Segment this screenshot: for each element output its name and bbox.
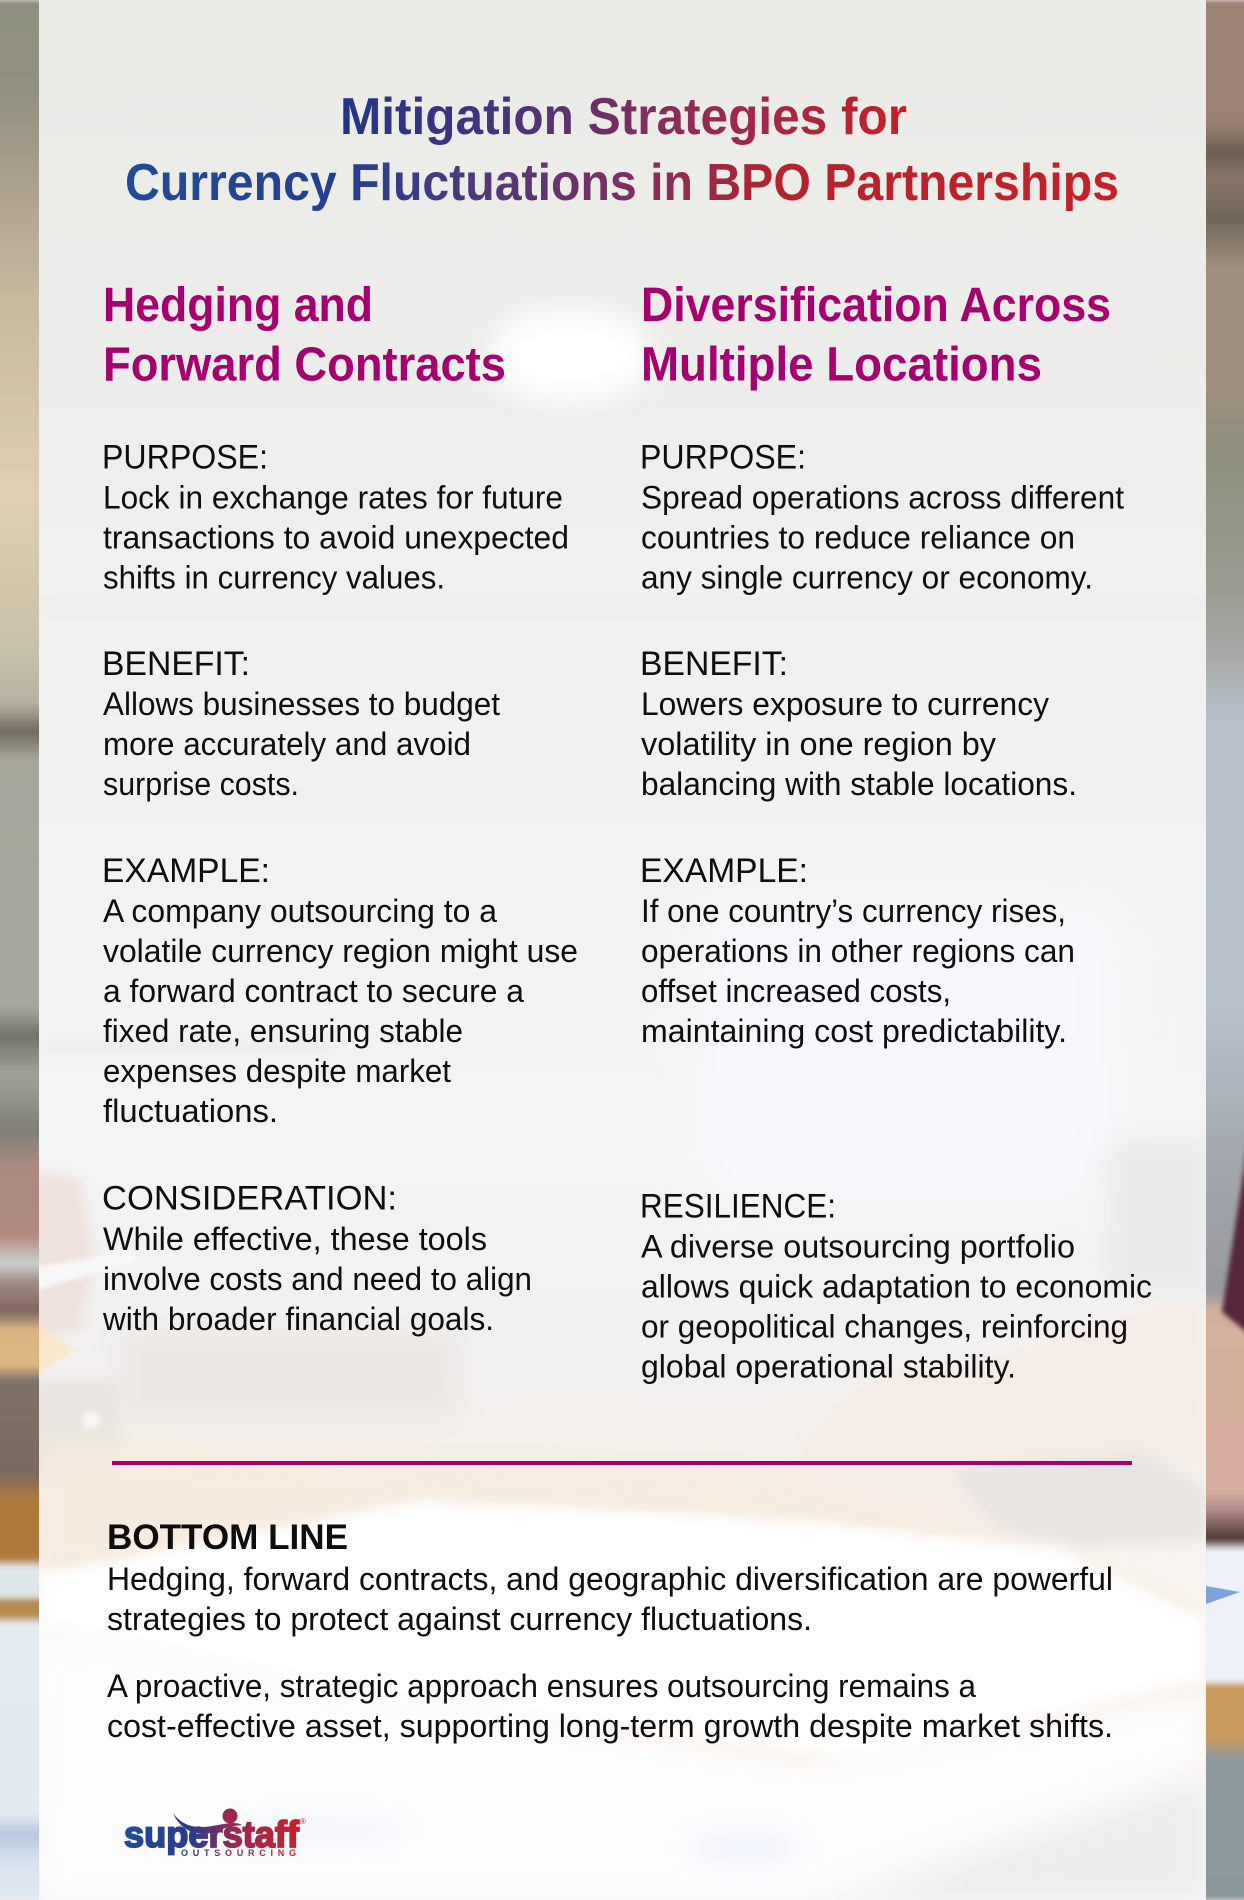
text block: resilience: or geopolitical changes, reinforcing xyxy=(641,1308,1128,1344)
text block: example: If one country’s currency rises, xyxy=(641,893,1066,929)
heading: bottom line: BOTTOM LINE xyxy=(107,1518,348,1557)
text block: bottom line approach: cost-effective asset, supporting long-term growth despite market shifts. xyxy=(107,1708,1113,1744)
text block: consideration: involve costs and need to align xyxy=(103,1261,532,1297)
text block: example xyxy=(102,852,578,1129)
text block: example: EXAMPLE: xyxy=(640,852,808,890)
text block: example: A company outsourcing to a xyxy=(103,893,497,929)
background photo strip: left xyxy=(0,0,39,1899)
title xyxy=(125,88,1119,212)
text block: purpose: Spread operations across different xyxy=(641,480,1124,516)
text block: bottom line approach: A proactive, strategic approach ensures outsourcing remains a xyxy=(107,1668,976,1704)
text block: example: volatile currency region might use xyxy=(103,933,578,969)
text block: benefit: Allows businesses to budget xyxy=(103,686,500,722)
text block: consideration: While effective, these tools xyxy=(103,1221,487,1257)
text block: benefit xyxy=(102,645,500,802)
text block: purpose xyxy=(640,438,1124,596)
panel: hedging and forward contracts column xyxy=(102,279,578,1337)
text block: benefit: BENEFIT: xyxy=(102,645,250,683)
text block: example: fixed rate, ensuring stable xyxy=(103,1013,463,1049)
heading: hedging and forward contracts: Forward Contracts xyxy=(103,338,506,392)
text block: example: operations in other regions can xyxy=(641,933,1075,969)
heading: hedging and forward contracts: Hedging and xyxy=(103,279,373,332)
text block: resilience: A diverse outsourcing portfolio xyxy=(641,1228,1075,1264)
text block: example xyxy=(640,852,1075,1049)
text block: purpose: PURPOSE: xyxy=(640,438,806,476)
logo: superstaff outsourcing: ® xyxy=(300,1817,306,1826)
hand in the photo xyxy=(1008,1308,1201,1366)
text block: consideration xyxy=(102,1180,532,1337)
text block: example: maintaining cost predictability. xyxy=(641,1013,1067,1049)
text block: example: expenses despite market xyxy=(103,1053,451,1089)
text block: benefit: more accurately and avoid xyxy=(103,726,471,762)
text block: purpose xyxy=(102,438,569,596)
text block: benefit: balancing with stable locations. xyxy=(641,766,1077,802)
text block: purpose: countries to reduce reliance on xyxy=(641,520,1075,556)
text block: consideration: CONSIDERATION: xyxy=(102,1180,397,1218)
text block: purpose: PURPOSE: xyxy=(102,438,268,476)
icon: swoosh figure xyxy=(173,1808,242,1834)
logo: superstaff outsourcing: superstaff xyxy=(124,1814,300,1855)
left hand and pen in the photo xyxy=(39,1170,95,1334)
title: Mitigation Strategies for xyxy=(340,88,907,146)
text block: example: a forward contract to secure a xyxy=(103,973,524,1009)
background photo strip: right xyxy=(1206,0,1244,1900)
text block: consideration: with broader financial goals. xyxy=(102,1301,494,1337)
text block: bottom line summary: strategies to protect against currency fluctuations. xyxy=(107,1601,812,1637)
panel: diversification across multiple locations column xyxy=(640,279,1152,1384)
heading: diversification across multiple locations xyxy=(641,279,1111,392)
title: Currency Fluctuations in BPO Partnerships xyxy=(125,154,1119,212)
text block: resilience: RESILIENCE: xyxy=(640,1188,836,1226)
text block: resilience: allows quick adaptation to economic xyxy=(641,1268,1152,1304)
text block: purpose: Lock in exchange rates for future xyxy=(103,480,563,516)
heading: diversification across multiple locations: Multiple Locations xyxy=(641,338,1042,392)
text block: bottom line summary: Hedging, forward contracts, and geographic diversification are powerful xyxy=(107,1561,1113,1597)
text block: purpose: transactions to avoid unexpected xyxy=(103,520,569,556)
text block: benefit: Lowers exposure to currency xyxy=(641,686,1049,722)
logo: superstaff outsourcing: OUTSOURCING xyxy=(181,1848,296,1858)
text block: benefit: surprise costs. xyxy=(103,766,299,802)
text block: purpose: any single currency or economy. xyxy=(641,560,1093,596)
text block: example: EXAMPLE: xyxy=(102,852,270,890)
text block: benefit xyxy=(640,645,1077,802)
heading: hedging and forward contracts xyxy=(103,279,506,392)
text block: benefit: BENEFIT: xyxy=(640,645,788,683)
text block: resilience xyxy=(640,1188,1152,1384)
text block: benefit: volatility in one region by xyxy=(641,726,996,762)
panel: translucent white overlay xyxy=(39,310,1206,1900)
heading: diversification across multiple locations: Diversification Across xyxy=(641,279,1111,332)
text block: resilience: global operational stability. xyxy=(641,1348,1016,1384)
wood and paper in the photo xyxy=(40,1446,1206,1760)
text block: example: fluctuations. xyxy=(103,1093,278,1129)
text block: purpose: shifts in currency values. xyxy=(103,560,445,596)
text block: bottom line summary xyxy=(107,1561,1113,1637)
text block: example: offset increased costs, xyxy=(641,973,951,1009)
panel: bottom line xyxy=(107,1518,1113,1744)
text block: bottom line approach xyxy=(107,1668,1113,1744)
